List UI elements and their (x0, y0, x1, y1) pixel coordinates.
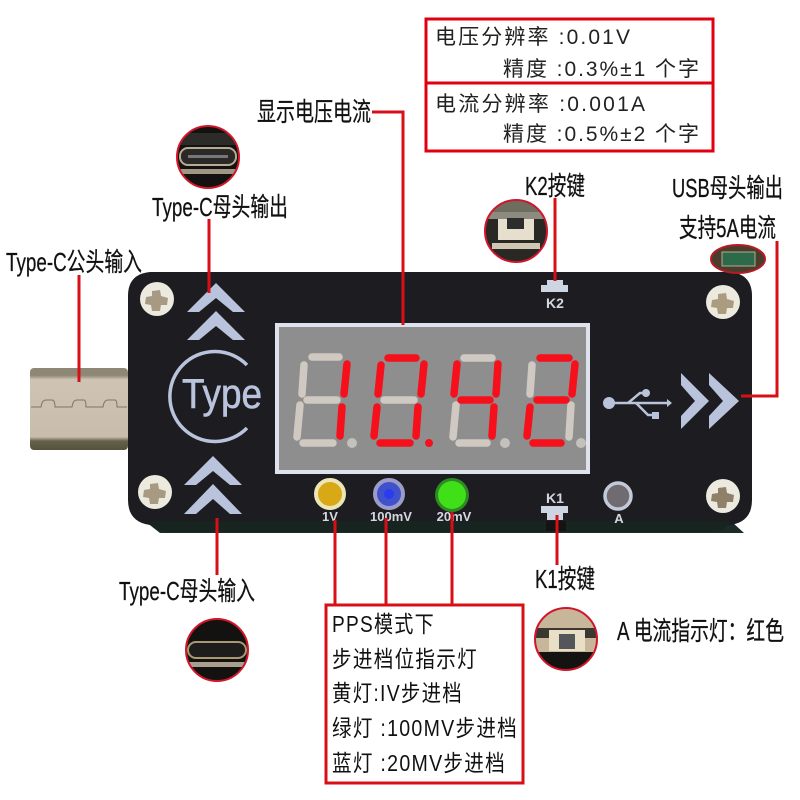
screw: bottom left (138, 475, 172, 509)
screw: top left (140, 282, 174, 316)
LED: green (435, 478, 469, 512)
label: Type-C female output: Type-C母头输出 (152, 192, 288, 222)
seven segment display (277, 325, 588, 472)
digit 3 (453, 358, 510, 448)
LED labels: A (614, 511, 624, 526)
LED labels: 1V (322, 509, 338, 524)
panel: resolution and accuracy: 精度 :0.5%±2 个字 (503, 123, 699, 146)
label: Type-C male input: Type-C公头输入 (6, 247, 142, 277)
panel: PPS step indicators: 蓝灯 :20MV步进档 (332, 750, 506, 776)
screw: top right (706, 285, 740, 319)
Type-C male connector (30, 368, 128, 450)
panel: PPS step indicators (326, 605, 523, 783)
panel: resolution and accuracy: 电压分辨率 :0.01V (435, 26, 630, 49)
icon: USB symbol (603, 389, 672, 419)
LED labels: 20mV (437, 509, 472, 524)
panel: resolution and accuracy: 精度 :0.3%±1 个字 (503, 58, 699, 81)
panel: PPS step indicators: 绿灯 :100MV步进档 (332, 715, 518, 741)
panel: PPS step indicators: PPS模式下 (332, 611, 435, 637)
icon: upward chevrons top (187, 283, 245, 340)
LED: yellow (316, 480, 344, 508)
panel: PPS step indicators: 黄灯:IV步进档 (332, 680, 463, 706)
digit 4 (527, 358, 586, 448)
LED: blue (375, 480, 403, 508)
K2 silkscreen (541, 280, 568, 311)
panel: resolution and accuracy: 电流分辨率 :0.001A (435, 93, 645, 116)
LED labels: 100mV (370, 509, 412, 524)
K1 silkscreen: K1 (546, 490, 564, 506)
screw: bottom right (706, 479, 740, 513)
LED labels (322, 509, 624, 526)
photo: K2 button (484, 200, 548, 262)
icon: right chevrons (681, 373, 739, 429)
digit 1 (297, 357, 357, 448)
device board (128, 272, 752, 533)
photo: Type-C female output (177, 126, 239, 188)
LED: current A (605, 483, 631, 509)
panel: resolution and accuracy (426, 19, 713, 151)
K1 silkscreen (541, 490, 568, 531)
photo: Type-C female input (186, 619, 248, 681)
digit 2 (374, 358, 433, 447)
label: K1 button: K1按键 (535, 564, 595, 594)
photo: USB female port (711, 245, 765, 273)
icon: Type-C logo: Type (182, 370, 262, 417)
photo: K1 button (535, 608, 597, 672)
icon: upward chevrons bottom (184, 456, 242, 514)
icon: Type-C logo (170, 351, 262, 442)
callout lines (79, 112, 777, 605)
label: voltage and current display: 显示电压电流 (257, 97, 371, 127)
label: Type-C female input: Type-C母头输入 (119, 576, 255, 606)
panel: PPS step indicators: 步进档位指示灯 (332, 646, 478, 672)
label: K2 button: K2按键 (525, 171, 585, 201)
K2 silkscreen: K2 (546, 295, 564, 311)
